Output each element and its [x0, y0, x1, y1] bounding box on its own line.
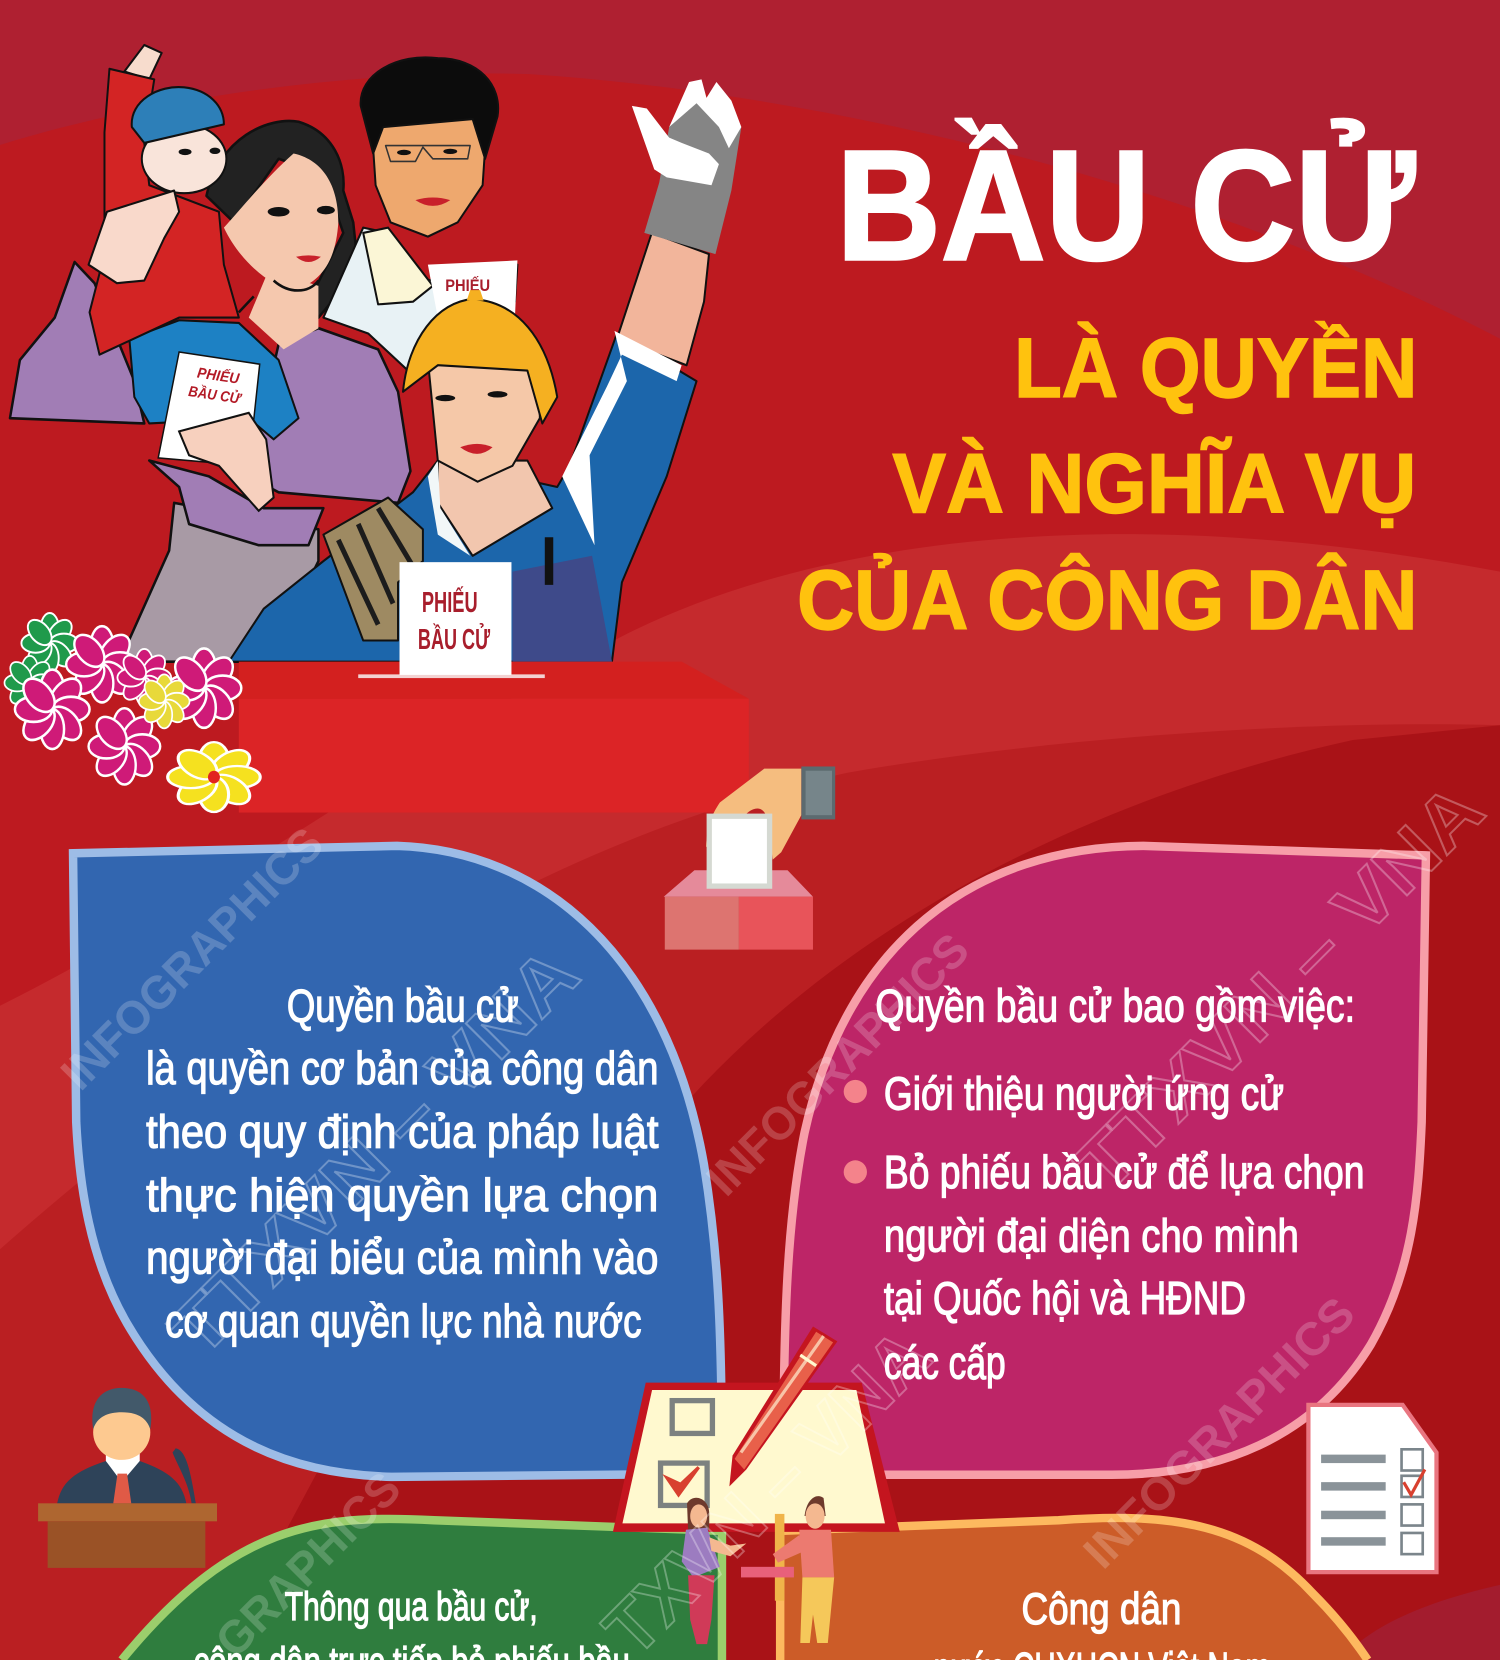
text: definition: cơ quan quyền lực nhà nước [165, 1295, 641, 1347]
ballot paper [400, 562, 511, 675]
watermarks: TTXVN – VNA [154, 931, 594, 1372]
icon: ballot sheet with checkboxes and pencil [613, 1327, 900, 1532]
text: definition: theo quy định của pháp luật [146, 1106, 658, 1158]
icon: pencil [729, 1327, 837, 1486]
worker [229, 79, 741, 662]
desk and post [741, 1514, 794, 1601]
text: definition: là quyền cơ bản của công dân [146, 1042, 658, 1094]
man figure [773, 1496, 834, 1643]
text: citizens: Công dân [1022, 1585, 1181, 1634]
text: list: Giới thiệu người ứng cử [884, 1067, 1284, 1119]
watermarks: INFOGRAPHICS [51, 817, 333, 1100]
illustration: citizens voting at ballot box [4, 45, 749, 813]
illustration: two people talking [682, 1496, 834, 1644]
icon: speaker at podium [38, 1388, 217, 1568]
subtitle: VÀ NGHĨA VỤ [892, 435, 1416, 530]
flowers [4, 613, 260, 812]
subtitle [797, 320, 1417, 647]
text: list: các cấp [884, 1336, 1006, 1388]
watermarks: INFOGRAPHICS [1073, 1287, 1365, 1578]
panel: definition of voting right [73, 846, 722, 1477]
glove [632, 79, 741, 254]
text: list: người đại diện cho mình [884, 1209, 1299, 1261]
text: definition: người đại biểu của mình vào [146, 1232, 658, 1284]
text: direct vote: Thông qua bầu cử, [285, 1584, 538, 1629]
woman's ballot paper and hand [158, 352, 274, 511]
icon: hand dropping ballot [664, 766, 835, 950]
ballot paper: BẦU CỬ [418, 622, 490, 655]
panel: what voting includes [783, 846, 1426, 1475]
text: citizens [934, 1585, 1270, 1660]
title: BẦU CỬ [836, 118, 1415, 293]
woman's ballot paper and hand: PHIẾU [196, 363, 241, 388]
panel: direct vote (green) [122, 1519, 722, 1660]
watermarks: TTXVN – VNA [1059, 767, 1499, 1208]
baby [89, 45, 299, 439]
woman [10, 121, 410, 662]
text: definition [146, 980, 658, 1347]
text: direct vote [194, 1584, 630, 1660]
subtitle: CỦA CÔNG DÂN [797, 552, 1417, 647]
man [323, 57, 517, 371]
watermarks [51, 767, 1499, 1660]
icon: checklist document [1308, 1405, 1436, 1572]
text: list: Bỏ phiếu bầu cử để lựa chọn [884, 1146, 1365, 1198]
ballot box [239, 562, 749, 813]
woman figure [682, 1498, 746, 1644]
man: PHIẾU [445, 276, 490, 295]
text: list: tại Quốc hội và HĐND [884, 1272, 1246, 1324]
ballot paper: PHIẾU [422, 586, 478, 618]
title [797, 118, 1417, 647]
subtitle: LÀ QUYỀN [1014, 320, 1417, 415]
woman's ballot paper and hand: BẦU CỬ [187, 382, 244, 408]
watermarks: INFOGRAPHICS [696, 923, 979, 1205]
panel: citizens (orange) [780, 1518, 1368, 1660]
text: list [844, 980, 1365, 1388]
text: definition: thực hiện quyền lựa chọn [146, 1169, 658, 1221]
text: list: Quyền bầu cử bao gồm việc: [875, 980, 1355, 1032]
text: definition: Quyền bầu cử [287, 980, 519, 1032]
